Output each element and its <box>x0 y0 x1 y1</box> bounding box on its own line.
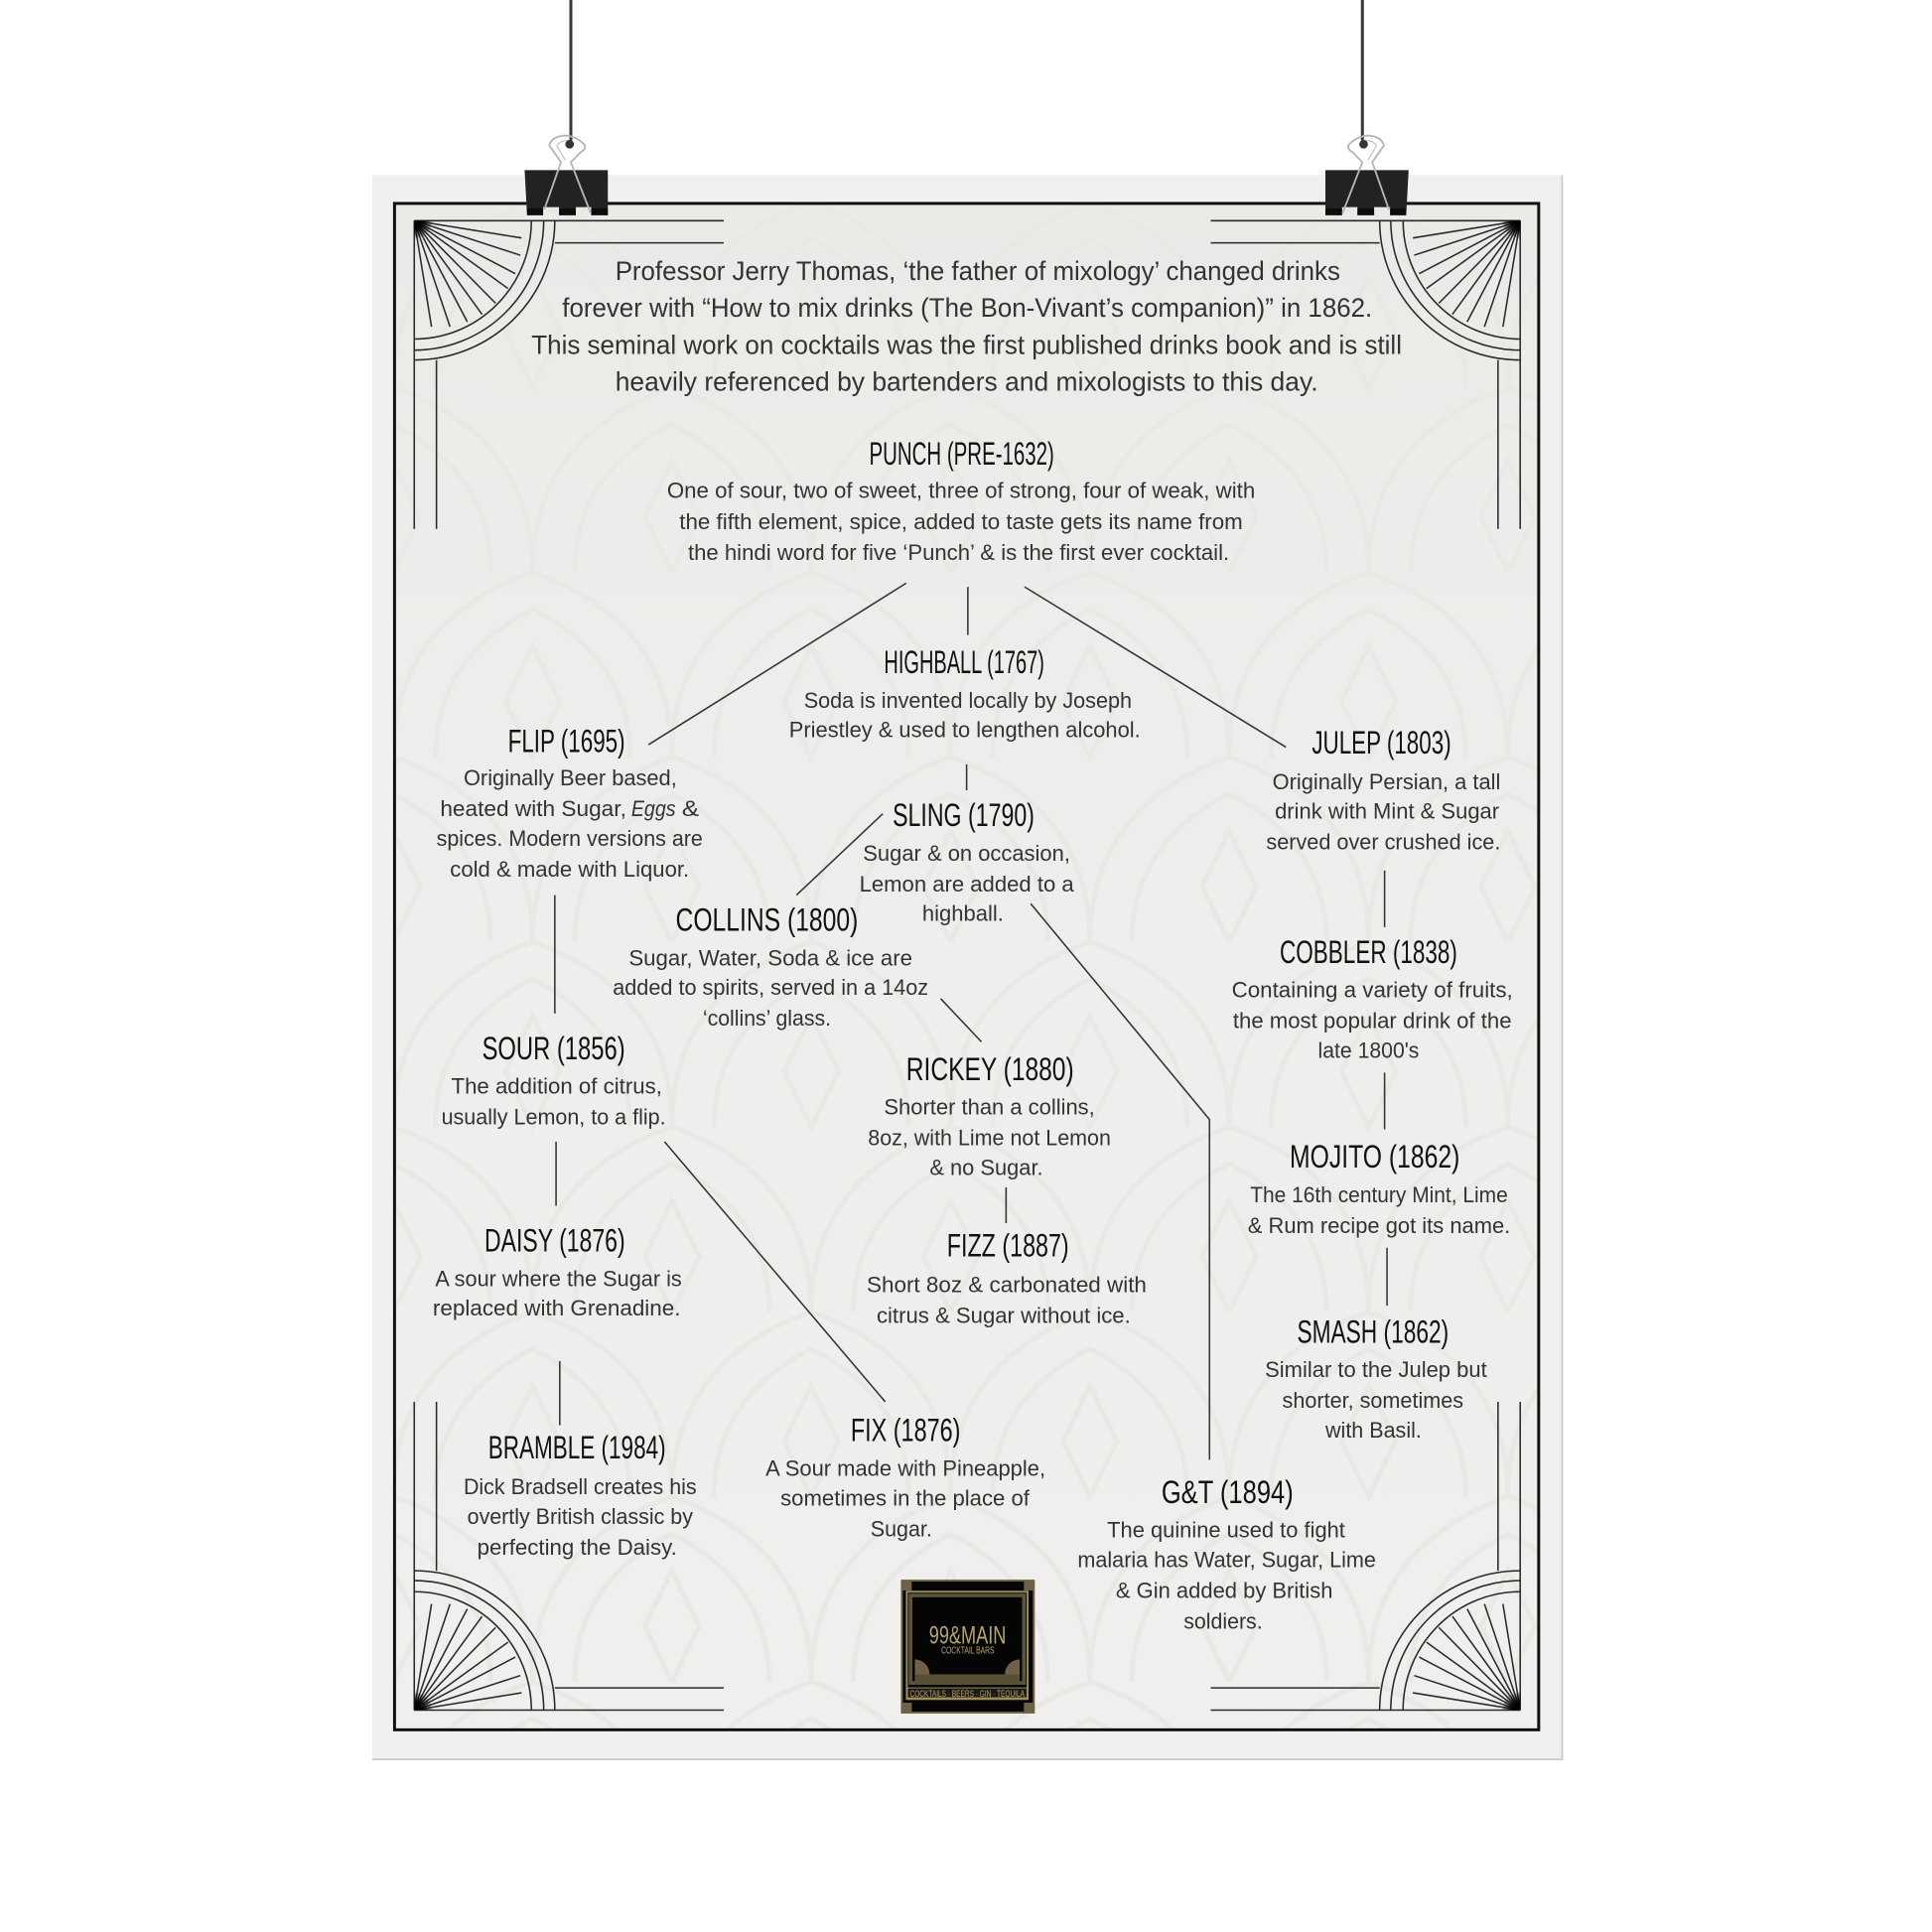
intro text <box>531 256 1402 397</box>
node: Sling: highball. <box>922 901 1004 926</box>
corner ornament: top right <box>1211 220 1520 529</box>
node: Bramble: perfecting the Daisy. <box>478 1535 677 1560</box>
logo: 99 & Main cocktail bars <box>901 1580 1035 1714</box>
binder clip: right <box>1325 136 1409 215</box>
node: Julep: drink with Mint & Sugar <box>1275 799 1499 824</box>
node: Collins: added to spirits, served in a 14oz <box>613 975 928 1000</box>
node: Smash: Similar to the Julep but <box>1265 1357 1487 1382</box>
node: Highball: HIGHBALL (1767) <box>884 644 1044 680</box>
node: Fizz: Short 8oz & carbonated with <box>867 1272 1147 1297</box>
node: G&T <box>1077 1474 1376 1634</box>
node: Rickey <box>868 1051 1111 1179</box>
node: Punch: PUNCH (PRE-1632) <box>870 436 1054 472</box>
intro text: Professor Jerry Thomas, ‘the father of mixology’ changed drinks <box>616 256 1340 286</box>
node: Daisy: A sour where the Sugar is <box>435 1266 682 1291</box>
node: Highball <box>789 644 1141 743</box>
node: Julep <box>1266 725 1500 855</box>
node: G&T: The quinine used to fight <box>1107 1518 1345 1543</box>
node: Mojito: The 16th century Mint, Lime <box>1250 1182 1508 1207</box>
node: Julep: JULEP (1803) <box>1311 725 1451 760</box>
corner ornament: bottom right <box>1211 1402 1520 1710</box>
hanging string: left <box>570 0 572 141</box>
node: Flip: & <box>682 796 700 821</box>
node: Sling: Lemon are added to a <box>860 872 1075 897</box>
node: Collins: COLLINS (1800) <box>676 902 858 938</box>
poster paper <box>372 175 1562 1759</box>
node: Sling <box>860 797 1075 926</box>
node: Punch: the fifth element, spice, added to taste gets its name from <box>679 509 1243 534</box>
node: Flip: spices. Modern versions are <box>437 826 703 851</box>
corner ornament: top left <box>414 220 724 529</box>
node: Fix: Sugar. <box>871 1516 932 1541</box>
node: Bramble: overtly British classic by <box>468 1504 693 1529</box>
connector lines <box>555 583 1387 1459</box>
node: Sour: usually Lemon, to a flip. <box>442 1105 666 1130</box>
hanging string: right <box>1361 0 1363 141</box>
node: Fix: sometimes in the place of <box>780 1485 1031 1510</box>
node: Smash <box>1265 1313 1487 1443</box>
poster paper edge <box>372 175 1562 1759</box>
logo: 99 & Main cocktail bars: COCKTAILS · BEERS · GIN · TEQUILA <box>909 1689 1026 1699</box>
intro text: heavily referenced by bartenders and mixologists to this day. <box>616 367 1318 397</box>
node: Smash: with Basil. <box>1324 1418 1422 1443</box>
node: Julep: Originally Persian, a tall <box>1273 769 1500 794</box>
node: Cobbler: late 1800's <box>1318 1038 1420 1063</box>
node: Cobbler: Containing a variety of fruits, <box>1232 978 1513 1003</box>
node: Fix: A Sour made with Pineapple, <box>765 1456 1045 1481</box>
node: Mojito: MOJITO (1862) <box>1290 1139 1459 1174</box>
intro text: This seminal work on cocktails was the first published drinks book and is still <box>531 330 1402 359</box>
node: Flip: Eggs <box>631 796 676 821</box>
node: Bramble: Dick Bradsell creates his <box>464 1474 697 1499</box>
node: Highball: Priestley & used to lengthen alcohol. <box>789 718 1141 743</box>
node: Collins: ‘collins’ glass. <box>703 1006 831 1031</box>
node: Bramble: BRAMBLE (1984) <box>488 1430 666 1465</box>
node: Sling: Sugar & on occasion, <box>863 841 1070 866</box>
node: Julep: served over crushed ice. <box>1266 830 1500 855</box>
node: Smash: SMASH (1862) <box>1297 1313 1449 1349</box>
node: G&T: G&T (1894) <box>1162 1474 1294 1510</box>
node: Cobbler <box>1232 934 1513 1063</box>
node: Sour: The addition of citrus, <box>452 1074 662 1099</box>
node: Flip <box>437 724 703 882</box>
background art deco pattern <box>394 204 1539 1729</box>
node: Rickey: Shorter than a collins, <box>884 1095 1095 1120</box>
node: G&T: malaria has Water, Sugar, Lime <box>1077 1547 1376 1572</box>
node: Collins <box>613 902 928 1031</box>
intro text: forever with “How to mix drinks (The Bon-Vivant’s companion)” in 1862. <box>562 293 1372 323</box>
node: Fizz <box>867 1227 1147 1328</box>
node: Cobbler: the most popular drink of the <box>1233 1009 1512 1034</box>
node: Punch: One of sour, two of sweet, three of strong, four of weak, with <box>667 479 1255 503</box>
node: Rickey: RICKEY (1880) <box>906 1051 1074 1087</box>
node: Collins: Sugar, Water, Soda & ice are <box>628 945 912 970</box>
node: Fizz: FIZZ (1887) <box>947 1227 1069 1263</box>
node: Fix <box>765 1413 1045 1541</box>
node: G&T: & Gin added by British <box>1116 1578 1332 1602</box>
double frame <box>394 204 1539 1729</box>
node: Fix: FIX (1876) <box>851 1413 960 1449</box>
node: G&T: soldiers. <box>1183 1609 1263 1634</box>
node: Bramble <box>464 1430 697 1560</box>
poster inner background <box>394 204 1539 1729</box>
node: Sling: SLING (1790) <box>893 797 1035 833</box>
corner ornament: bottom left <box>414 1402 724 1710</box>
node: Sour <box>442 1031 666 1130</box>
logo: 99 & Main cocktail bars: COCKTAIL BARS <box>941 1644 995 1656</box>
node: Smash: shorter, sometimes <box>1283 1388 1463 1413</box>
node: Fizz: citrus & Sugar without ice. <box>877 1304 1131 1328</box>
logo: 99 & Main cocktail bars: 99&MAIN <box>929 1622 1006 1649</box>
node: Punch: the hindi word for five ‘Punch’ & is the first ever cocktail. <box>688 540 1229 565</box>
node: Mojito: & Rum recipe got its name. <box>1248 1213 1510 1238</box>
node: Flip: Originally Beer based, <box>464 765 677 790</box>
node: Flip: heated with Sugar, <box>440 796 626 821</box>
node: Daisy: replaced with Grenadine. <box>433 1296 681 1320</box>
node: Highball: Soda is invented locally by Joseph <box>804 688 1132 713</box>
panel: poster <box>372 136 1562 1759</box>
node: Rickey: & no Sugar. <box>929 1155 1043 1179</box>
node: Cobbler: COBBLER (1838) <box>1280 934 1457 970</box>
node: Daisy <box>433 1222 682 1320</box>
node: Sour: SOUR (1856) <box>483 1031 625 1066</box>
node: Flip: FLIP (1695) <box>508 724 625 759</box>
node: Rickey: 8oz, with Lime not Lemon <box>868 1126 1111 1151</box>
node: Flip: cold & made with Liquor. <box>450 857 689 882</box>
node: Mojito <box>1248 1139 1510 1238</box>
node: Punch <box>667 436 1255 565</box>
binder clip: left <box>524 136 608 215</box>
node: Daisy: DAISY (1876) <box>484 1222 625 1258</box>
